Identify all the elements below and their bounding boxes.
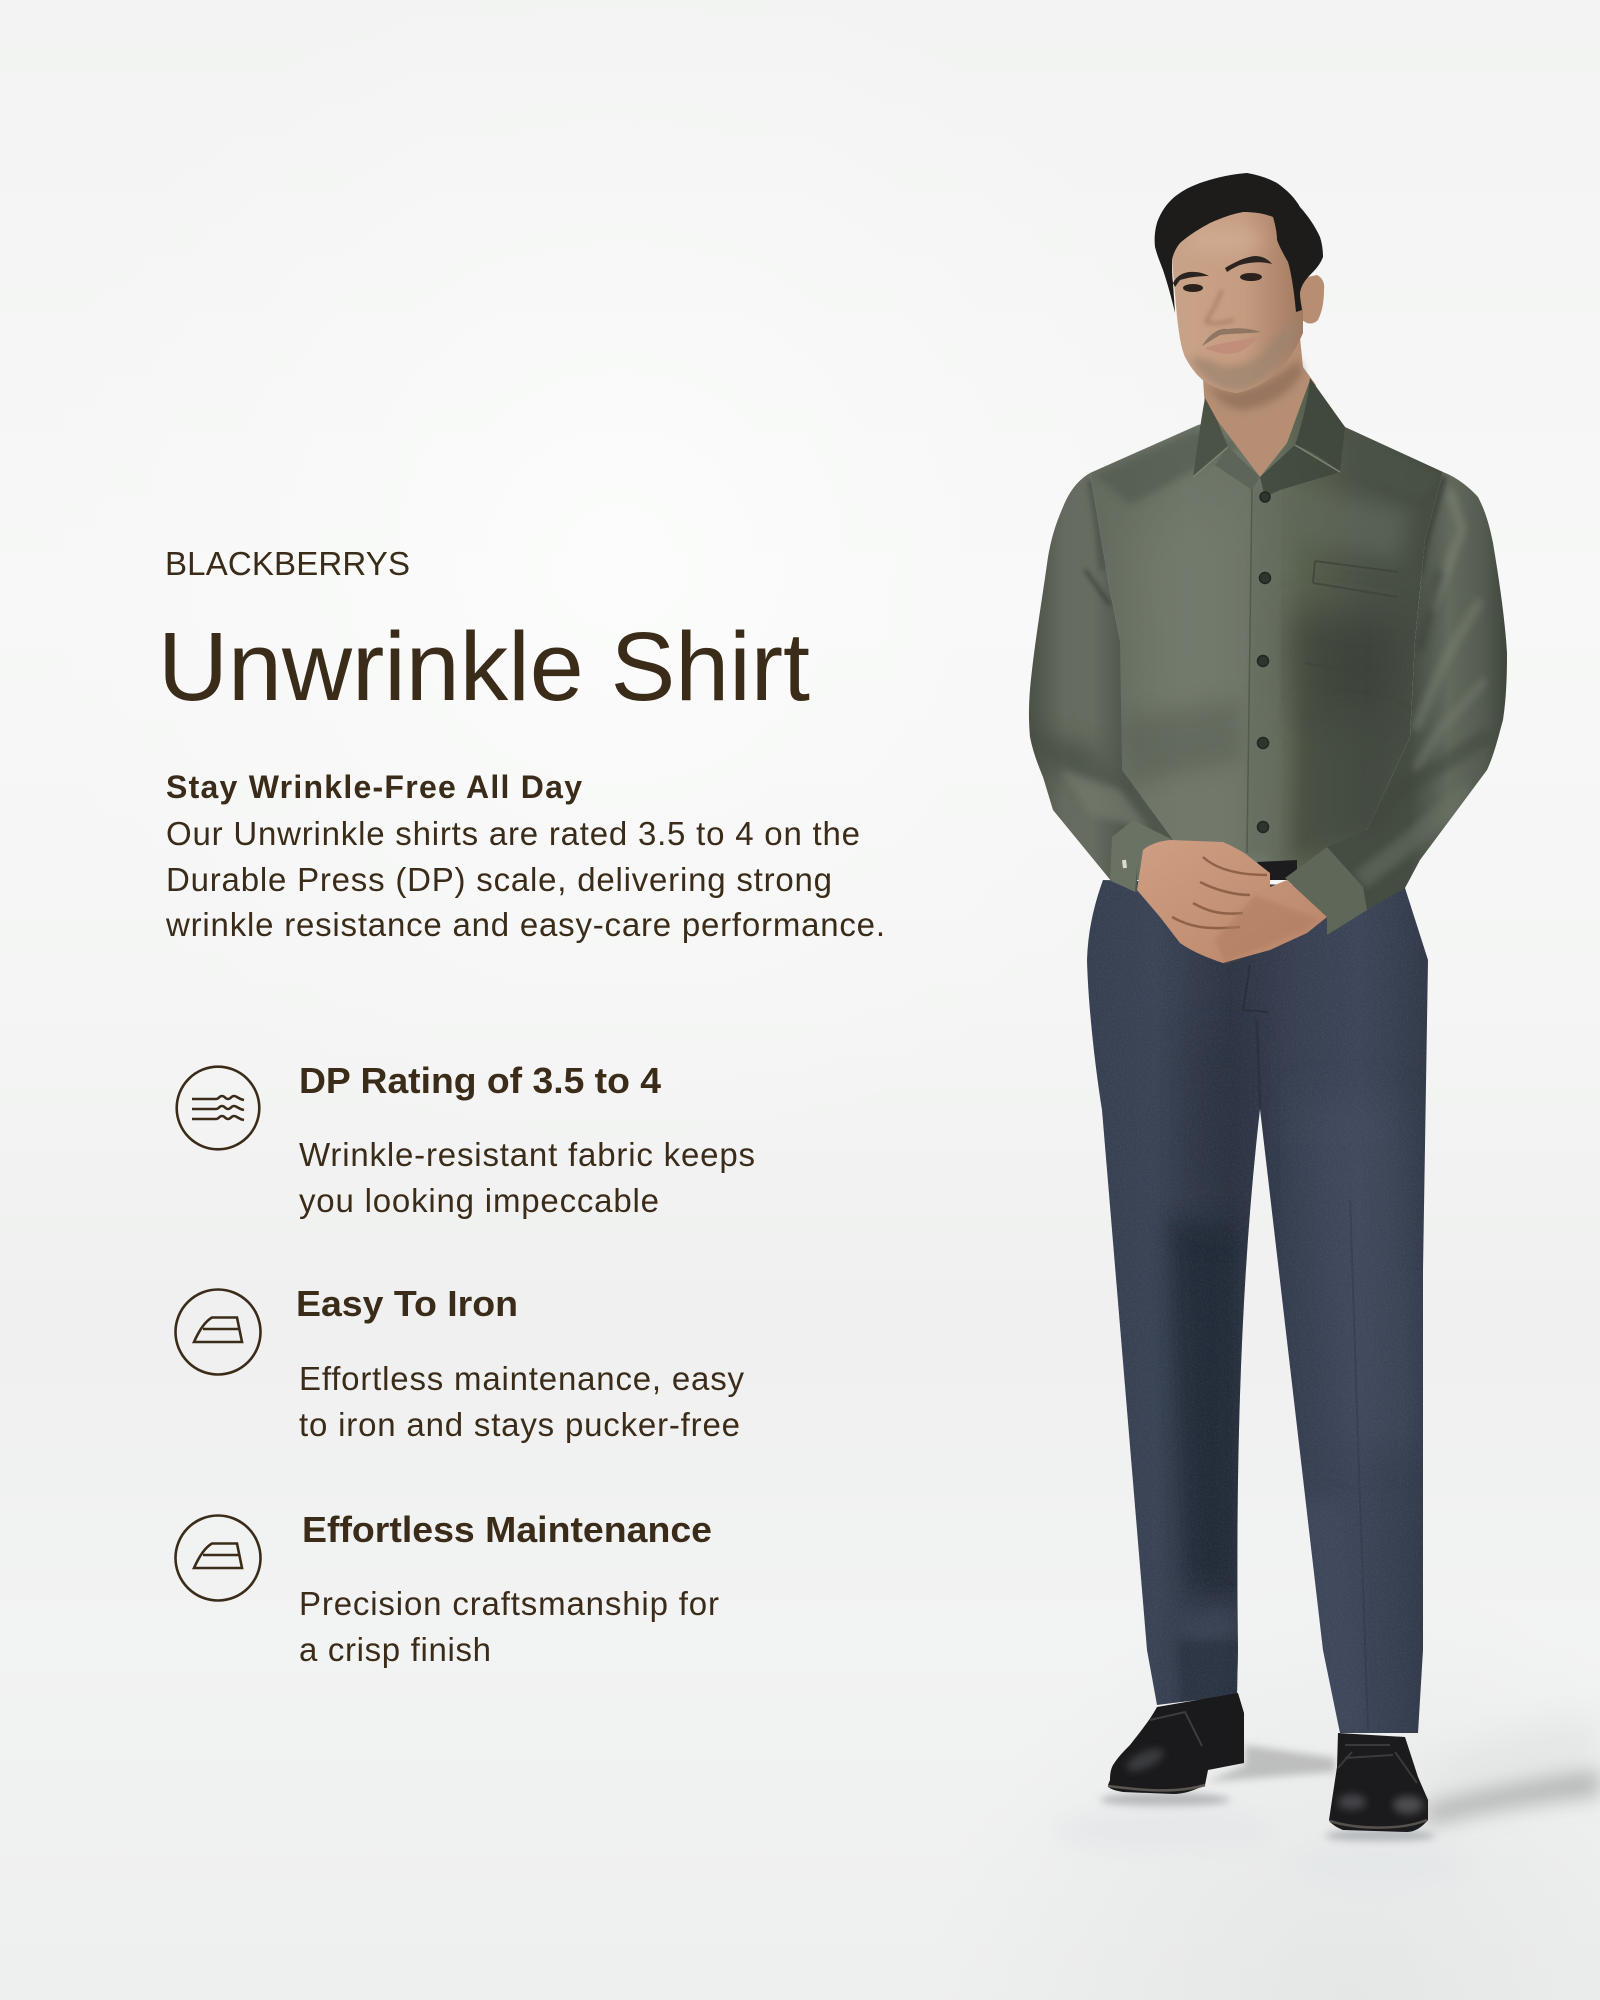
feature: effortless maintenance: Effortless Maintenance xyxy=(302,1509,712,1550)
intro text: Durable Press (DP) scale, delivering strong xyxy=(166,861,832,898)
floor shadows xyxy=(1055,1715,1600,1889)
torso xyxy=(1090,380,1443,880)
trousers xyxy=(1087,880,1428,1735)
feature: DP rating: you looking impeccable xyxy=(299,1182,659,1219)
icon: iron xyxy=(176,1290,260,1374)
intro text: Stay Wrinkle-Free All Day xyxy=(166,769,582,805)
left arm xyxy=(1029,473,1173,892)
feature: DP rating xyxy=(177,1060,755,1219)
feature: easy to iron xyxy=(176,1283,744,1443)
feature: easy to iron: to iron and stays pucker-free xyxy=(299,1406,740,1443)
intro text: wrinkle resistance and easy-care performance. xyxy=(165,906,885,943)
face xyxy=(1172,200,1303,393)
feature: effortless maintenance: Precision craftsmanship for xyxy=(299,1585,719,1622)
intro text: Our Unwrinkle shirts are rated 3.5 to 4 on the xyxy=(166,815,860,852)
feature: easy to iron: Effortless maintenance, easy xyxy=(299,1360,744,1397)
right shoe xyxy=(1329,1733,1428,1832)
shirt xyxy=(1028,378,1507,910)
right cuff xyxy=(1285,847,1367,935)
title: Unwrinkle Shirt xyxy=(158,612,810,721)
feature: easy to iron: Easy To Iron xyxy=(296,1283,518,1324)
nose xyxy=(1206,290,1234,323)
placket xyxy=(1247,480,1280,853)
buttons xyxy=(1258,492,1270,832)
eyes xyxy=(1183,284,1203,292)
belt xyxy=(1257,860,1297,880)
hands xyxy=(1137,840,1327,963)
icon: iron xyxy=(176,1516,260,1600)
neck xyxy=(1203,338,1316,485)
mouth xyxy=(1205,337,1257,354)
feature: effortless maintenance: a crisp finish xyxy=(299,1631,491,1668)
intro text xyxy=(165,769,885,943)
feature: DP rating: DP Rating of 3.5 to 4 xyxy=(299,1060,661,1101)
right arm xyxy=(1327,472,1507,910)
left shoe xyxy=(1108,1693,1244,1794)
person xyxy=(1028,173,1507,1832)
left cuff xyxy=(1110,820,1173,892)
icon: waves xyxy=(177,1067,259,1149)
moustache xyxy=(1202,328,1261,346)
collar xyxy=(1193,378,1345,497)
ear xyxy=(1294,275,1324,324)
hair xyxy=(1155,173,1323,313)
feature: effortless maintenance xyxy=(176,1509,719,1668)
eyebrows xyxy=(1173,272,1209,287)
brand name: BLACKBERRYS xyxy=(165,545,410,582)
pocket xyxy=(1305,561,1398,675)
cuff monogram xyxy=(1124,860,1125,868)
feature: DP rating: Wrinkle-resistant fabric keeps xyxy=(299,1136,755,1173)
